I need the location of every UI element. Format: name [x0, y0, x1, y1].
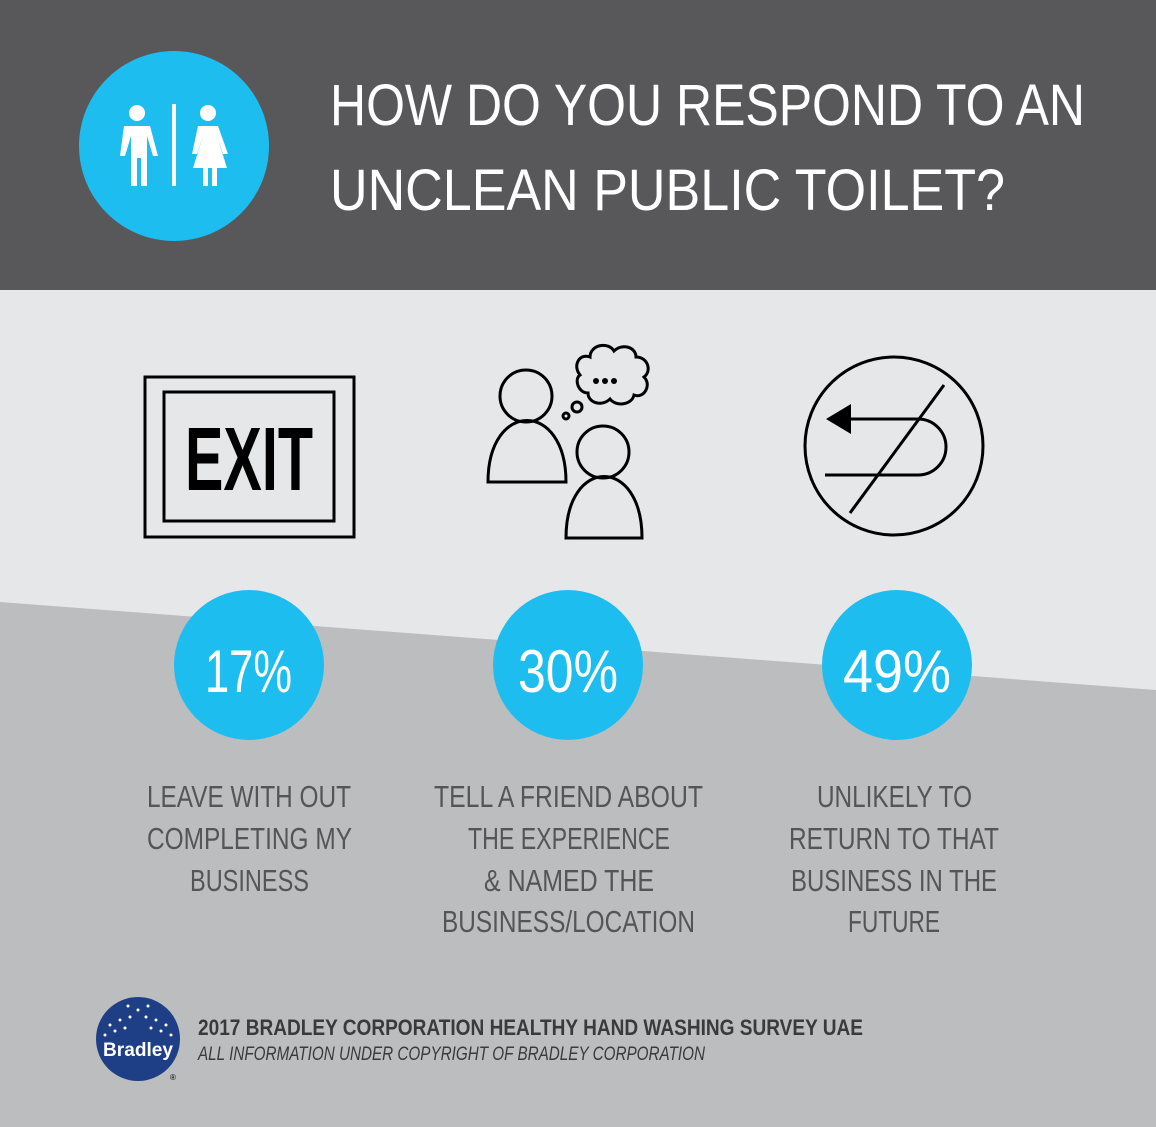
- icon: exit sign: EXIT: [185, 410, 313, 510]
- labels: THE EXPERIENCE: [468, 821, 670, 856]
- title: UNCLEAN PUBLIC TOILET?: [330, 158, 1005, 223]
- footer text: [197, 1015, 863, 1065]
- stat circles: [174, 590, 972, 740]
- labels: COMPLETING MY: [147, 821, 352, 856]
- labels: BUSINESS/LOCATION: [442, 904, 695, 939]
- icon: exit sign: [145, 377, 354, 537]
- stat circles: 30%: [518, 638, 618, 705]
- labels: LEAVE WITH OUT: [147, 779, 351, 814]
- labels: [147, 779, 999, 939]
- icon: no return: [805, 357, 983, 535]
- logo: ®: [170, 1073, 176, 1082]
- footer text: ALL INFORMATION UNDER COPYRIGHT OF BRADLEY CORPORATION: [197, 1044, 705, 1065]
- icon: restroom: [79, 51, 269, 241]
- labels: FUTURE: [848, 904, 940, 939]
- header band: [0, 0, 1156, 290]
- stat circles: 49%: [843, 638, 951, 705]
- title: [330, 73, 1085, 223]
- logo: Bradley: [103, 1040, 173, 1061]
- labels: TELL A FRIEND ABOUT: [434, 779, 703, 814]
- logo: [96, 997, 180, 1082]
- labels: UNLIKELY TO: [817, 779, 972, 814]
- labels: & NAMED THE: [484, 863, 654, 898]
- labels: RETURN TO THAT: [789, 821, 999, 856]
- icon: people talking: [488, 345, 648, 538]
- stat circles: 17%: [205, 638, 292, 705]
- labels: BUSINESS IN THE: [791, 863, 997, 898]
- footer text: 2017 BRADLEY CORPORATION HEALTHY HAND WASHING SURVEY UAE: [198, 1015, 863, 1040]
- labels: BUSINESS: [190, 863, 309, 898]
